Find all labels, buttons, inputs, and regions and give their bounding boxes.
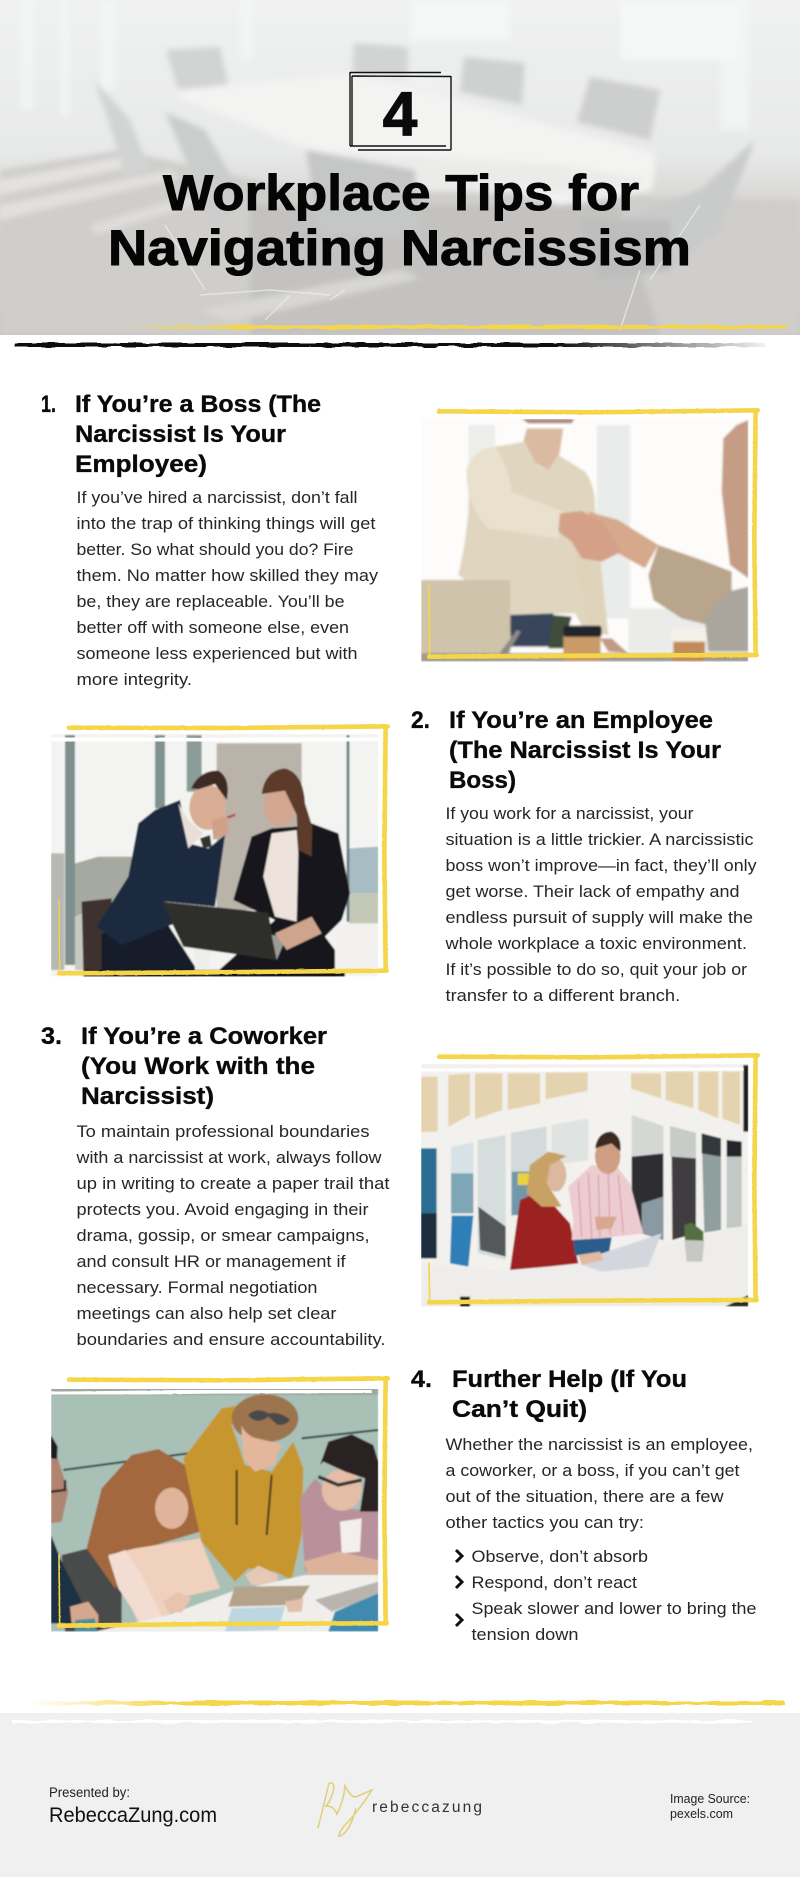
heading 1: If You’re a Boss (The (75, 391, 321, 418)
heading 2: (The Narcissist Is Your (449, 737, 721, 764)
photo 4: group around tablet (51, 1378, 388, 1632)
heading 1: 1. (41, 391, 56, 418)
yellow brush stroke above footer (30, 1701, 785, 1705)
body text 3: protects you. Avoid engaging in their (76, 1201, 369, 1219)
title: Workplace Tips for (163, 165, 639, 221)
body text 1: be, they are replaceable. You’ll be (76, 593, 344, 611)
heading 2: 2. (411, 707, 430, 734)
photo 2: man and woman at laptop (51, 726, 388, 977)
body text 2: If you work for a narcissist, your (446, 805, 694, 823)
title (108, 165, 691, 276)
image source: Image Source: (670, 1791, 750, 1806)
black brush stroke (15, 343, 765, 347)
photo 3: coworkers in glass office (421, 1055, 758, 1307)
body text 1: into the trap of thinking things will get (76, 515, 376, 533)
body text 1: better off with someone else, even (76, 619, 349, 637)
bullet 3: tension down (472, 1626, 578, 1644)
body text 3: meetings can also help set clear (76, 1305, 337, 1323)
body text 4: Whether the narcissist is an employee, (446, 1436, 753, 1454)
body text 4 (446, 1436, 753, 1532)
header background photo: conference room (0, 0, 800, 335)
logo: rebeccazung (372, 1799, 482, 1816)
heading 1: Narcissist Is Your (75, 421, 286, 448)
bullet 3: Speak slower and lower to bring the (472, 1600, 756, 1618)
body text 3 (75, 1123, 390, 1349)
body text 3: boundaries and ensure accountability. (76, 1331, 386, 1349)
image source: pexels.com (670, 1806, 733, 1821)
heading 2: Boss) (449, 767, 516, 794)
section 1 (41, 391, 379, 689)
heading 3: (You Work with the (81, 1053, 315, 1080)
number badge (350, 72, 451, 150)
body text 3: necessary. Formal negotiation (76, 1279, 318, 1297)
body text 1: someone less experienced but with (76, 645, 358, 663)
body text 3: drama, gossip, or smear campaigns, (76, 1227, 370, 1245)
body text 2: whole workplace a toxic environment. (444, 935, 747, 953)
body text 2: If it’s possible to do so, quit your job or (446, 961, 748, 979)
heading 2: If You’re an Employee (449, 707, 713, 734)
body text 3: up in writing to create a paper trail that (76, 1175, 390, 1193)
heading 4 (411, 1366, 687, 1423)
heading 4: Further Help (If You (452, 1366, 687, 1393)
logo (318, 1783, 482, 1836)
body text 2: get worse. Their lack of empathy and (446, 883, 740, 901)
heading 3: Narcissist) (81, 1083, 214, 1110)
heading 3 (41, 1023, 327, 1110)
bullet 2: Respond, don’t react (472, 1574, 637, 1592)
body text 2: endless pursuit of supply will make the (446, 909, 753, 927)
section 2 (411, 707, 757, 1005)
title block with number badge (108, 72, 691, 276)
body text 1: more integrity. (76, 671, 192, 689)
yellow brush stroke (117, 325, 787, 329)
heading 4: 4. (411, 1366, 432, 1393)
photo 1: handshake (421, 410, 758, 662)
footer (0, 1713, 800, 1877)
heading 3: 3. (41, 1023, 62, 1050)
image source (670, 1791, 750, 1821)
heading 1: Employee) (75, 451, 207, 478)
number badge: 4 (383, 80, 418, 149)
body text 3: To maintain professional boundaries (76, 1123, 370, 1141)
body text 4: other tactics you can try: (446, 1514, 644, 1532)
heading 3: If You’re a Coworker (81, 1023, 327, 1050)
body text 1 (76, 489, 379, 689)
body text 2: boss won’t improve—in fact, they’ll only (446, 857, 757, 875)
section 3 (41, 1023, 390, 1349)
bullet 3 (456, 1600, 756, 1644)
heading 4: Can’t Quit) (452, 1396, 587, 1423)
heading 2 (411, 707, 721, 794)
bullet list (456, 1548, 756, 1644)
body text 4: a coworker, or a boss, if you can’t get (446, 1462, 740, 1480)
presented by: RebeccaZung.com (49, 1804, 217, 1827)
body text 3: and consult HR or management if (76, 1253, 346, 1271)
body text 1: If you’ve hired a narcissist, don’t fall (76, 489, 358, 507)
presented by (49, 1785, 217, 1827)
body text 2: situation is a little trickier. A narcissistic (446, 831, 754, 849)
body text 2 (444, 805, 757, 1005)
section 4 (411, 1366, 756, 1644)
heading 1 (41, 391, 321, 478)
body text 4: out of the situation, there are a few (446, 1488, 724, 1506)
body text 2: transfer to a different branch. (446, 987, 680, 1005)
body text 1: better. So what should you do? Fire (76, 541, 354, 559)
body text 1: them. No matter how skilled they may (76, 567, 379, 585)
bullet 1: Observe, don’t absorb (472, 1548, 648, 1566)
title: Navigating Narcissism (108, 220, 691, 276)
presented by: Presented by: (49, 1785, 130, 1800)
body text 3: with a narcissist at work, always follow (75, 1149, 382, 1167)
